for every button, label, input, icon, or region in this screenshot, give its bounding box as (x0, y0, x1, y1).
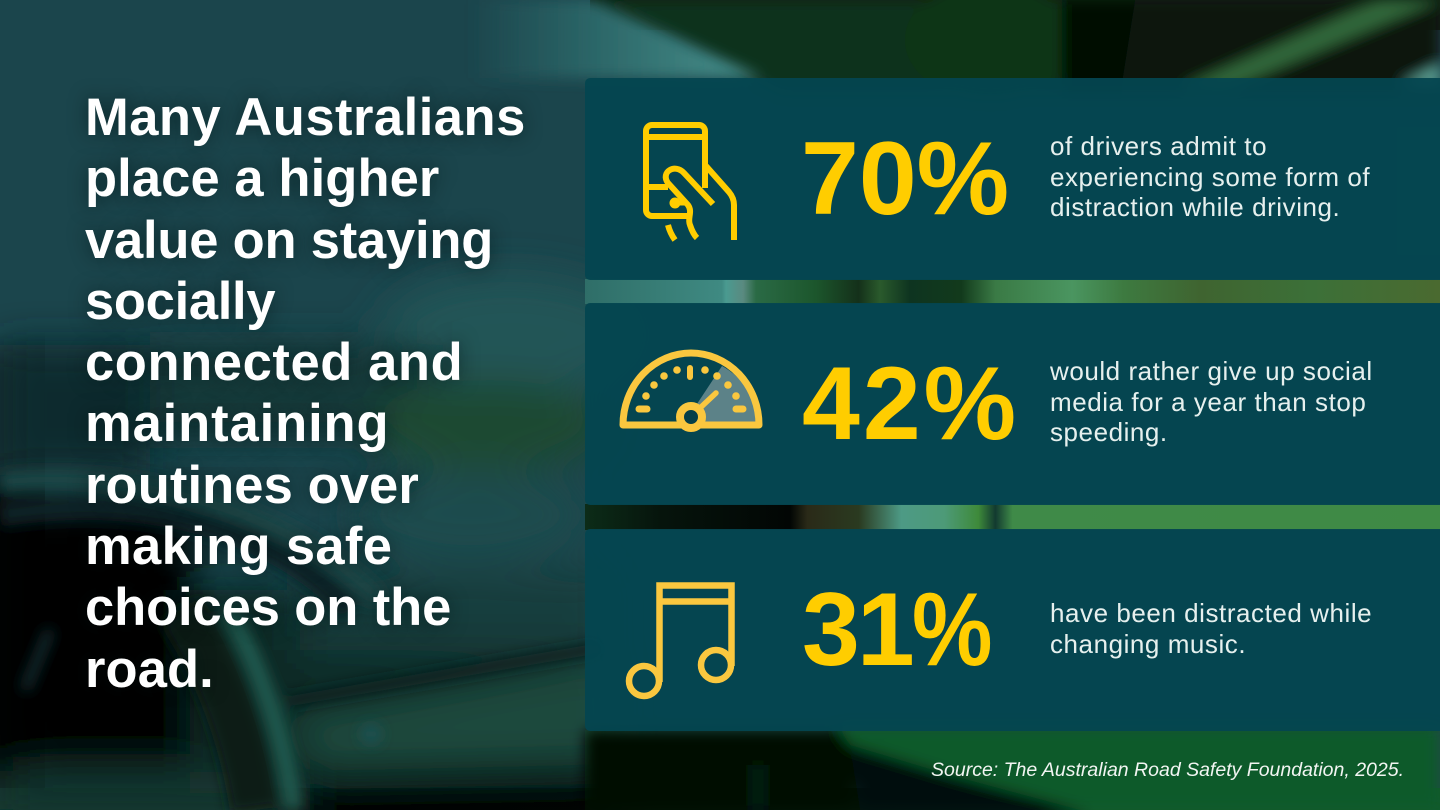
stat: 31% (802, 572, 992, 688)
description (1050, 356, 1373, 447)
title: road. (85, 640, 214, 699)
icon: music note (626, 582, 735, 700)
stat: 31%: 31 (802, 572, 912, 688)
description (1050, 598, 1372, 658)
bottom band (585, 725, 1440, 810)
stat: 31%: % (912, 572, 992, 688)
top right window (596, 0, 1440, 100)
description: speeding. (1050, 417, 1168, 447)
title: socially (85, 272, 275, 331)
description: of drivers admit to (1050, 131, 1267, 161)
description: have been distracted while (1050, 598, 1372, 628)
title: choices on the (85, 578, 451, 637)
title: place a higher (85, 149, 439, 208)
panel: 31 percent music (585, 529, 1440, 731)
icon: hand holding phone (643, 122, 737, 242)
description: changing music. (1050, 628, 1246, 658)
panel: 70 percent distracted (585, 78, 1440, 280)
title: connected and (85, 333, 463, 392)
title: routines over (85, 456, 419, 515)
title: value on staying (85, 211, 493, 270)
description (1050, 131, 1370, 222)
description: media for a year than stop (1050, 386, 1366, 416)
icon: speedometer (620, 350, 762, 432)
description: distraction while driving. (1050, 192, 1340, 222)
title: maintaining (85, 394, 390, 453)
description: would rather give up social (1050, 356, 1373, 386)
title: making safe (85, 517, 392, 576)
source note: Source: The Australian Road Safety Foundation, 2025. (931, 759, 1404, 781)
description: experiencing some form of (1050, 162, 1370, 192)
title: Many Australians (85, 88, 526, 147)
title (83, 88, 526, 699)
stat: 42%: 42% (802, 346, 1019, 462)
stat: 70%: 70% (801, 121, 1009, 237)
panel: 42 percent speeding (585, 303, 1440, 505)
